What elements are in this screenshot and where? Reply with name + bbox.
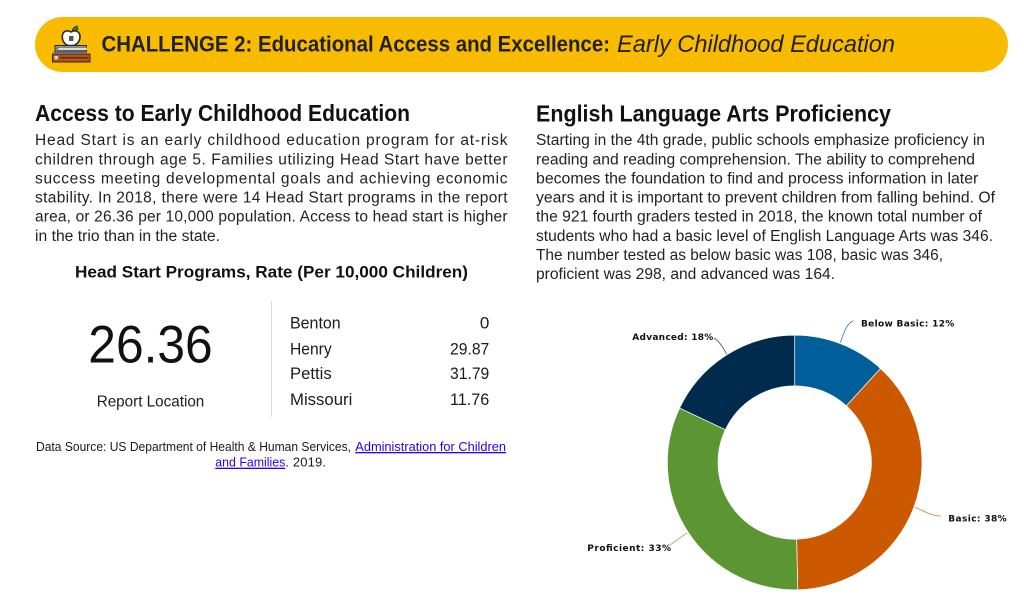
segment: advanced: [680, 335, 795, 430]
data source: Data Source: US Department of Health & Human Services,: [36, 439, 351, 454]
big number: report location: Report Location: [97, 394, 204, 411]
text block: head start description: Head Start is an early childhood education program for at-risk: [35, 132, 508, 149]
text block: proficiency description: [536, 132, 996, 283]
label: basic: Basic: 38%: [948, 515, 1007, 525]
data source: . 2019.: [285, 455, 326, 470]
heading: access: Access to Early Childhood Education: [35, 100, 410, 126]
segment: proficient: [667, 408, 798, 590]
label: advanced: Advanced: 18%: [632, 333, 713, 343]
banner title: CHALLENGE 2: Educational Access and Excellence:: [102, 32, 610, 56]
text block: proficiency description: becomes the foundation to find and process information in later: [536, 170, 978, 187]
data source: and Families: [215, 455, 286, 470]
label: proficient: Proficient: 33%: [587, 544, 671, 554]
table: county rates: 11.76: [450, 390, 489, 409]
table: county rates: Henry: [290, 339, 332, 358]
panel: access to early childhood education: [35, 100, 508, 470]
text block: proficiency description: The number tested as below basic was 108, basic was 346,: [536, 247, 943, 264]
text block: head start description: stability. In 2018, there were 14 Head Start programs in the report: [35, 189, 508, 206]
table: county rates: Benton: [290, 313, 341, 332]
text block: proficiency description: students who had a basic level of English Language Arts was 346.: [536, 228, 993, 245]
text block: proficiency description: reading and reading comprehension. The ability to comprehend: [536, 151, 975, 168]
panel: english language arts proficiency: [536, 100, 1007, 590]
icon: apple on stacked books: [52, 26, 90, 62]
banner subtitle: Early Childhood Education: [617, 31, 895, 58]
table: county rates: 29.87: [450, 339, 489, 358]
text block: proficiency description: proficient was 298, and advanced was 164.: [536, 266, 835, 283]
data source: Administration for Children: [355, 439, 506, 454]
donut chart: proficiency levels: [587, 320, 1007, 590]
segment: below basic: [795, 335, 880, 406]
table: county rates: 31.79: [450, 364, 489, 383]
heading: english language arts: English Language Arts Proficiency: [536, 100, 891, 126]
table: county rates: Pettis: [290, 364, 332, 383]
table: county rates: [290, 313, 489, 409]
table: county rates: 0: [480, 313, 489, 332]
header banner: [35, 17, 1008, 72]
text block: proficiency description: years and it is important to prevent children from falling behind. Of: [536, 189, 996, 206]
data source: [36, 439, 506, 470]
label: below basic: Below Basic: 12%: [861, 320, 954, 330]
chart heading: head start rate: Head Start Programs, Rate (Per 10,000 Children): [75, 263, 468, 282]
text block: head start description: area, or 26.36 per 10,000 population. Access to head start is higher: [35, 209, 508, 226]
big number: report location: 26.36: [88, 316, 213, 375]
text block: proficiency description: Starting in the 4th grade, public schools emphasize proficiency in: [536, 132, 985, 149]
table: county rates: Missouri: [290, 390, 352, 409]
text block: head start description: [35, 132, 508, 245]
text block: proficiency description: the 921 fourth graders tested in 2018, the known total number of: [536, 209, 983, 226]
text block: head start description: children through age 5. Families utilizing Head Start have better: [35, 151, 508, 168]
text block: head start description: success meeting developmental goals and achieving economic: [35, 170, 508, 187]
text block: head start description: in the trio than in the state.: [35, 228, 220, 245]
big number: report location: [88, 316, 213, 411]
segment: basic: [797, 368, 922, 590]
